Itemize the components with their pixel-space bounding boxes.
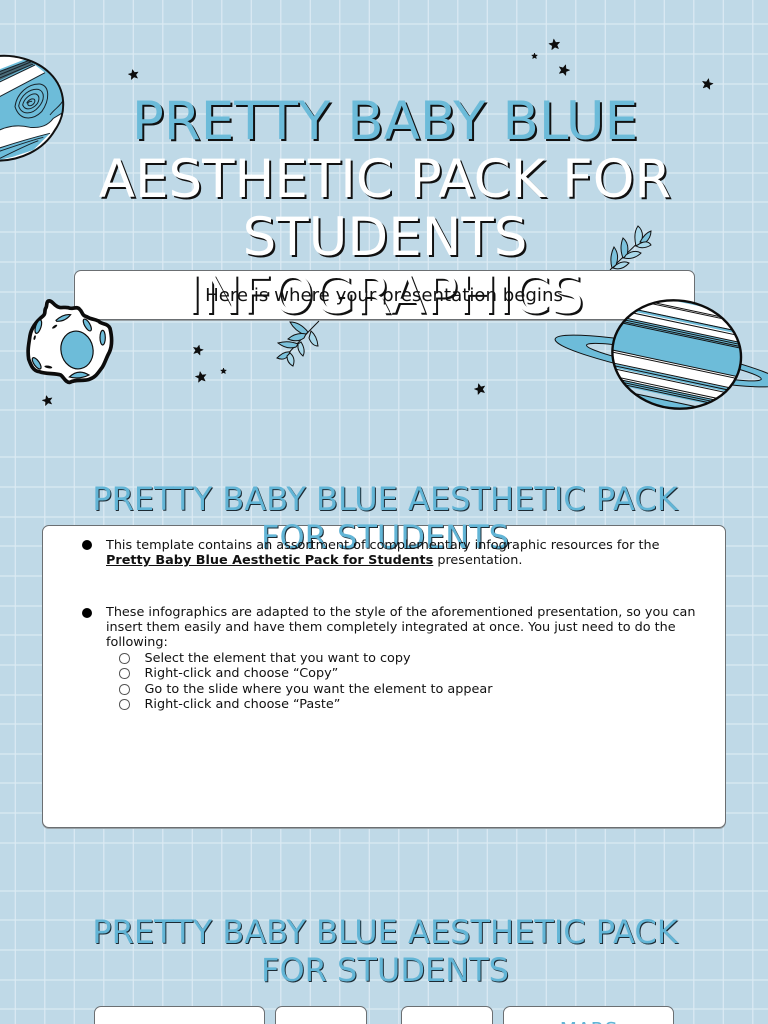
sub list <box>119 651 492 712</box>
card two <box>275 1006 367 1024</box>
bullet one <box>82 540 92 550</box>
heading: section two: PRETTY BABY BLUE AESTHETIC PACK <box>92 480 678 518</box>
second paragraph: following: <box>106 635 168 650</box>
sub list: Right-click and choose “Paste” <box>144 697 340 712</box>
card three <box>401 1006 493 1024</box>
bullet two <box>82 608 92 618</box>
heading: section three: FOR STUDENTS <box>261 951 509 989</box>
second paragraph: These infographics are adapted to the style of the aforementioned presentation, so you can <box>106 604 696 620</box>
card four with label <box>503 1006 674 1024</box>
second paragraph: insert them easily and have them completely integrated at once. You just need to do the <box>106 620 676 635</box>
title: PRETTY BABY BLUE <box>132 91 638 152</box>
panel: subtitle box <box>74 270 695 320</box>
title: AESTHETIC PACK FOR <box>99 149 671 210</box>
icon: striped planet top left <box>0 54 64 162</box>
title: STUDENTS <box>243 207 527 268</box>
heading: section three: PRETTY BABY BLUE AESTHETIC PACK <box>92 913 678 951</box>
heading: section two <box>92 480 680 556</box>
heading: section two: FOR STUDENTS <box>261 518 509 556</box>
heading: infographics: INFOGRAPHICS <box>186 265 584 326</box>
second paragraph <box>106 604 696 650</box>
card one <box>94 1006 265 1024</box>
subtitle: Here is where your presentation begins <box>205 285 563 306</box>
first paragraph second line: Pretty Baby Blue Aesthetic Pack for Students presentation. <box>106 553 522 568</box>
icon: ringed planet <box>554 299 768 410</box>
text block: instructions list <box>82 538 696 712</box>
sub list: Select the element that you want to copy <box>144 651 411 666</box>
first paragraph: This template contains an assortment of complementary infographic resources for the <box>106 538 660 553</box>
title <box>99 91 672 268</box>
heading: section three <box>92 913 680 989</box>
sub list: Go to the slide where you want the element to appear <box>144 682 492 697</box>
panel: instructions <box>42 525 726 828</box>
sub list: Right-click and choose “Copy” <box>144 666 338 681</box>
